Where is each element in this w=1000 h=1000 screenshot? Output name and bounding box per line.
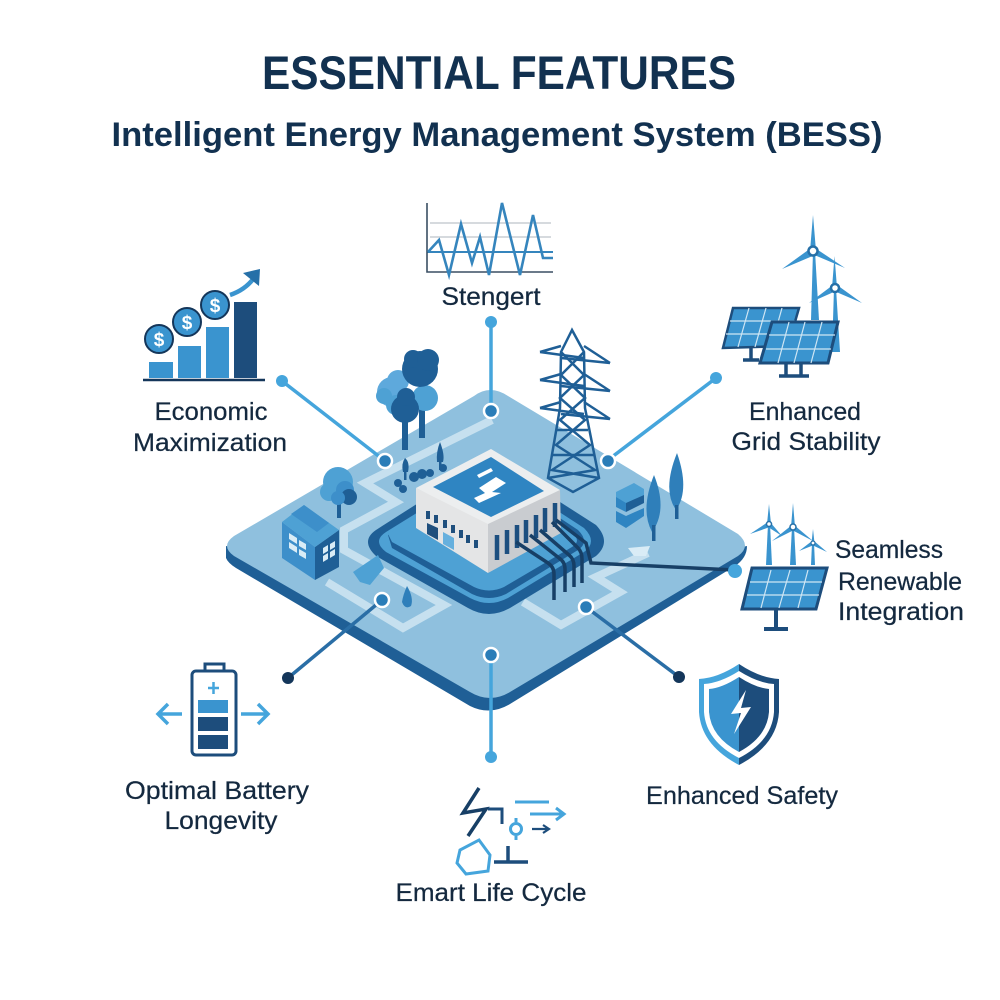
icon: shield with bolt (699, 664, 779, 765)
label: Seamless Renewable Integration (835, 536, 964, 626)
big tree cluster (376, 349, 439, 450)
icon: rising bars with dollar coins: $ (182, 313, 193, 334)
power cables (516, 520, 734, 600)
label: Seamless Renewable Integration: Renewable (838, 568, 962, 596)
substation pad rings (368, 465, 604, 614)
connector: Economic Maximization (276, 375, 392, 468)
label: Economic Maximization: Maximization (133, 429, 287, 457)
icon: battery with arrows (158, 664, 268, 755)
platform top surface (227, 390, 745, 698)
label: Enhanced Safety: Enhanced Safety (646, 782, 838, 810)
small shrubs and trees (394, 442, 447, 493)
subtitle: Intelligent Energy Management System (BESS) (112, 116, 882, 154)
vents (497, 503, 555, 560)
label: Optimal Battery Longevity: Longevity (164, 807, 278, 835)
icon: line chart (427, 203, 553, 275)
connector: Enhanced Grid Stability (601, 372, 722, 468)
connector: Emart Life Cycle (484, 648, 498, 763)
label: Enhanced Grid Stability: Enhanced (749, 398, 861, 426)
icon: rising bars with dollar coins: $ (154, 330, 165, 351)
icon: rising bars with dollar coins (143, 269, 265, 380)
connector: Stengert (484, 316, 498, 418)
connector: Seamless Renewable Integration (728, 564, 742, 578)
label: Optimal Battery Longevity (125, 777, 310, 835)
icon: turbines and solar panel (742, 503, 827, 629)
connector: Enhanced Safety (579, 600, 685, 683)
title: ESSENTIAL FEATURES (262, 46, 736, 99)
central isometric platform (226, 330, 747, 711)
transmission tower (540, 330, 610, 492)
central battery building (416, 449, 561, 573)
icon: rising bars with dollar coins: $ (210, 296, 221, 317)
windows (426, 511, 478, 548)
label: Economic Maximization (133, 398, 287, 457)
small markers on platform (353, 546, 650, 607)
label: Enhanced Grid Stability: Grid Stability (732, 428, 881, 456)
label: Optimal Battery Longevity: Optimal Battery (125, 777, 310, 805)
roof lightning icon (474, 468, 506, 503)
connector: Optimal Battery Longevity (282, 593, 389, 684)
left tree (320, 467, 357, 518)
light roads (327, 420, 648, 628)
label: Seamless Renewable Integration: Integration (838, 598, 964, 626)
label: Enhanced Grid Stability (732, 398, 881, 456)
icon: lifecycle glyphs (457, 788, 564, 874)
label: Seamless Renewable Integration: Seamless (835, 536, 943, 564)
platform side (226, 546, 747, 711)
label: Economic Maximization: Economic (154, 398, 268, 426)
office building (282, 505, 339, 580)
right cypress trees (646, 453, 683, 541)
icon: wind turbines and solar panels (723, 215, 862, 376)
label: Emart Life Cycle: Emart Life Cycle (396, 879, 586, 907)
label: Stengert: Stengert (442, 283, 541, 311)
right storage block (616, 483, 644, 528)
